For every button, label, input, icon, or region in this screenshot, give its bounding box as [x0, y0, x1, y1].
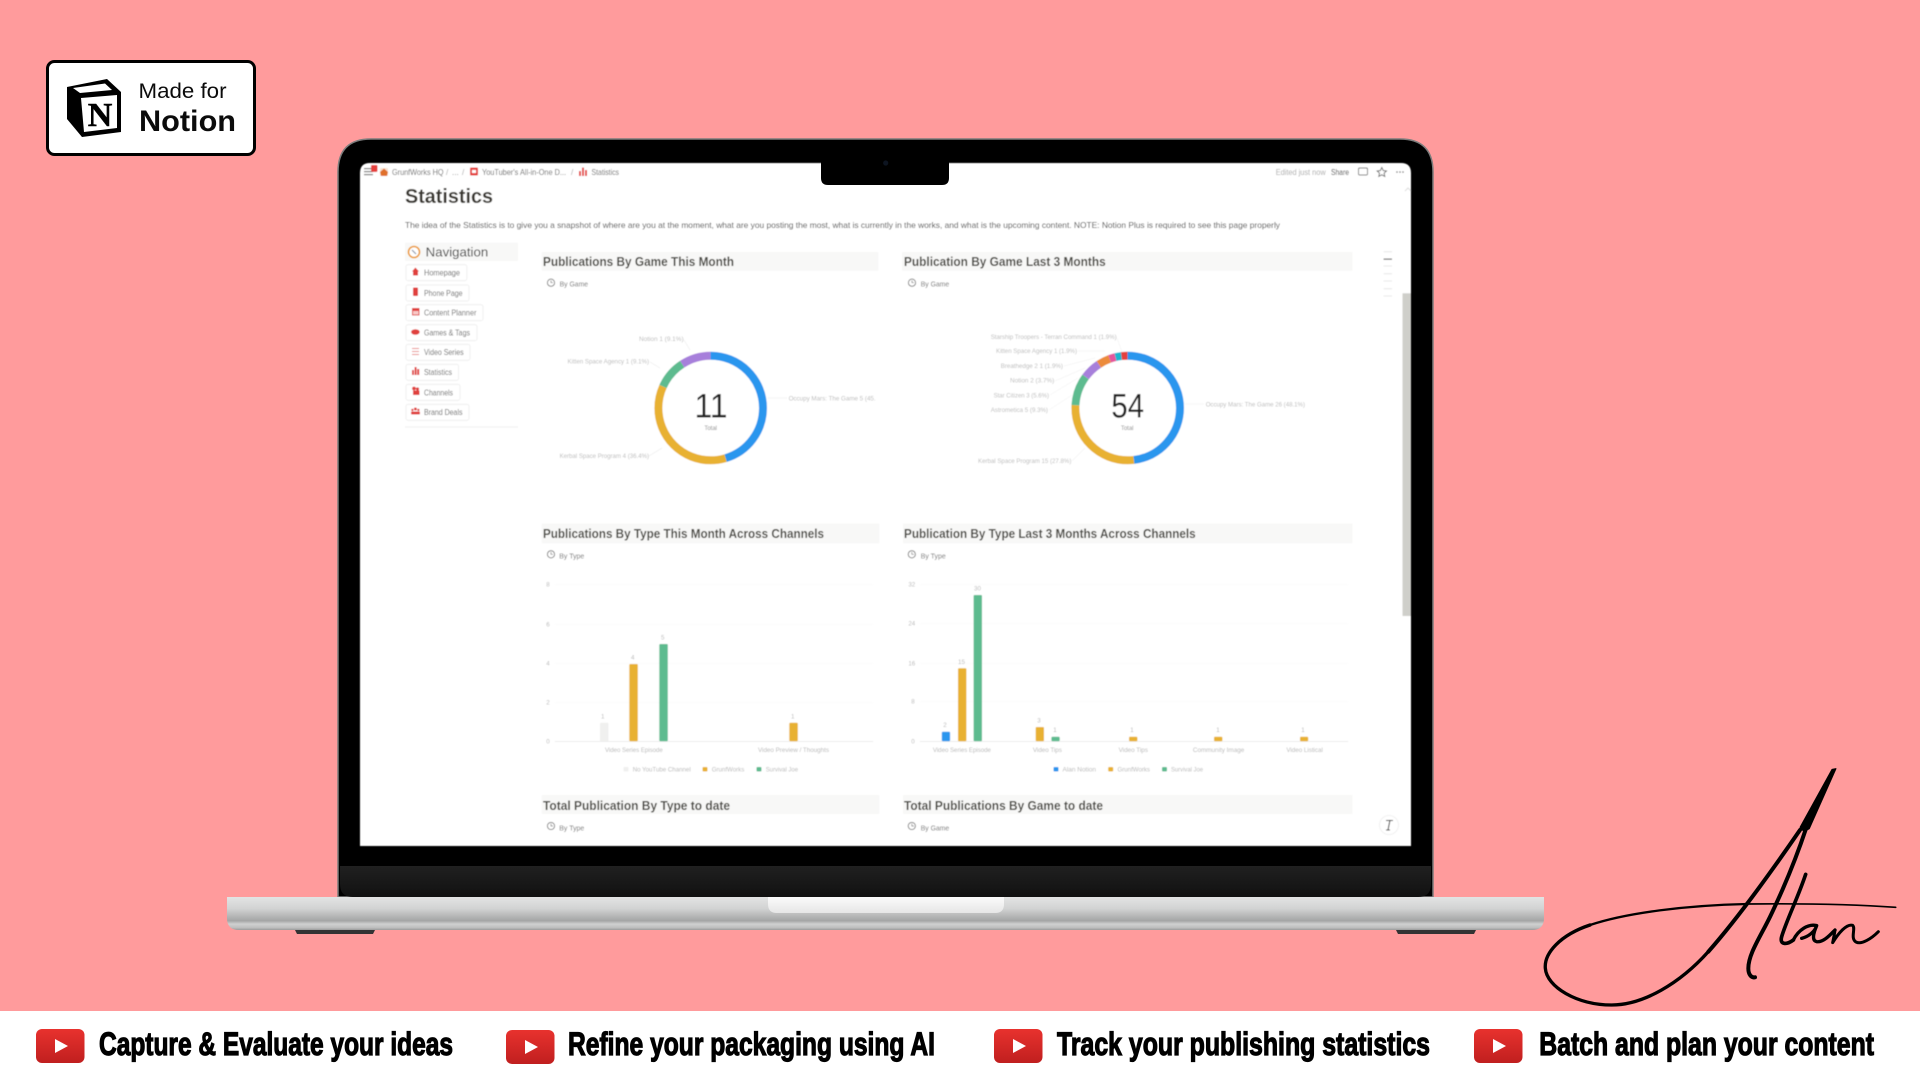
view tab: By Type: By Type [559, 824, 584, 832]
top right controls: Share [1331, 168, 1349, 177]
button: Phone Page [406, 285, 469, 301]
bar chart: type last 3 months: 8 [911, 699, 915, 706]
bar chart: type this month [546, 582, 873, 774]
donut chart: 54 total: Kitten Space Agency 1 (1.9%) [996, 348, 1077, 355]
view tab: By Type [547, 822, 584, 832]
heading: Publication By Game Last 3 Months [904, 255, 1106, 269]
button: Statistics: Statistics [424, 368, 452, 377]
help button with palm icon [1380, 816, 1398, 834]
breadcrumb bar: GrunfWorks HQ [392, 168, 444, 177]
chart legend: GrunfWorks [1118, 766, 1150, 774]
panel: total publications by game [903, 795, 1352, 832]
donut chart: 54 total: Notion 2 (3.7%) [1010, 378, 1054, 385]
bar chart: type this month: 4 [546, 660, 550, 667]
badge text [138, 80, 236, 138]
view tab: By Type: By Type [559, 552, 584, 560]
feature: track statistics [994, 1026, 1430, 1063]
icon: Notion cube logo [67, 79, 121, 137]
feature: refine packaging [506, 1026, 935, 1064]
view tab: By Game: By Game [921, 824, 949, 832]
laptop illustration [227, 139, 1544, 934]
donut chart: 54 total: Astrometica 5 (9.3%) [991, 407, 1048, 414]
button: Homepage: Homepage [424, 268, 461, 278]
bar chart: type this month: 5 [661, 635, 665, 642]
icon: play button [994, 1029, 1042, 1063]
badge: Made for Notion [48, 62, 254, 154]
donut chart: 54 total: Starship Troopers - Terran Command 1 (1.9%) [991, 334, 1117, 341]
page title: Statistics [405, 186, 493, 208]
bar chart: type last 3 months: 30 [974, 586, 981, 593]
donut chart: 11 total: Occupy Mars: The Game 5 (45. [789, 395, 876, 402]
bar chart: type last 3 months: Video Tips [1119, 747, 1148, 754]
navigation heading: Navigation [426, 244, 488, 260]
heading [542, 252, 878, 271]
icon: play button [1474, 1029, 1522, 1063]
donut chart: 54 total: Occupy Mars: The Game 26 (48.1%) [1206, 401, 1305, 408]
bar chart: type last 3 months: 24 [908, 621, 916, 628]
panel: publication by type last 3 months [903, 524, 1352, 774]
button: Content Planner: Content Planner [424, 308, 477, 318]
button: Statistics [406, 364, 459, 380]
scrollbar [1402, 188, 1411, 616]
bar chart: type last 3 months: 1 [1301, 727, 1305, 734]
camera [883, 160, 888, 166]
donut chart: 11 total: Kerbal Space Program 4 (36.4%) [560, 453, 649, 460]
hinge band [340, 866, 1431, 897]
bar chart: type last 3 months: 3 [1037, 718, 1041, 724]
table of contents markers [1384, 252, 1392, 296]
badge text: Made for [138, 80, 227, 103]
bar chart: type this month: 1 [791, 714, 795, 721]
donut chart: 54 total [978, 334, 1305, 465]
chart legend [624, 766, 799, 774]
right foot [1396, 930, 1476, 934]
button: Channels: Channels [424, 388, 453, 398]
view tab: By Game [908, 279, 949, 288]
view tab: By Type: By Type [921, 552, 946, 560]
view tab: By Game [547, 279, 588, 288]
laptop base [227, 897, 1544, 930]
feature: track statistics: Track your publishing statistics [1057, 1026, 1430, 1062]
bar chart: type last 3 months: 32 [908, 582, 916, 589]
view tab: By Type [547, 551, 584, 560]
button: Brand Deals: Brand Deals [424, 408, 462, 417]
chart legend: Survival Joe [1171, 766, 1204, 774]
button: Video Series: Video Series [424, 348, 464, 357]
page description: The idea of the Statistics is to give you a snapshot of where are you at the moment, what are you posting the most, what is currently in the works, and what is the upcoming content. NOTE: Notion Plus is required to see this page properly [405, 220, 1281, 230]
feature: refine packaging: Refine your packaging using AI [568, 1026, 935, 1062]
chart legend: GrunfWorks [712, 766, 744, 774]
view tab: By Game [908, 822, 949, 832]
bar chart: type this month: 4 [631, 654, 635, 662]
bar chart: type last 3 months: 16 [908, 660, 916, 667]
laptop lid [338, 139, 1433, 897]
heading [903, 524, 1352, 543]
heading [542, 795, 879, 814]
donut chart: 54 total: Total [1121, 426, 1134, 432]
button: Content Planner [406, 305, 483, 321]
donut chart: 54 total: Kerbal Space Program 15 (27.8%) [978, 458, 1071, 465]
heading: Publications By Game This Month [543, 255, 734, 269]
top right controls: Edited just now [1276, 168, 1326, 177]
button: Homepage [406, 265, 467, 281]
signature: Alan [1545, 769, 1896, 1005]
bar chart: type last 3 months: 1 [1216, 727, 1220, 734]
panel: publication by game last 3 months [902, 252, 1352, 465]
button: Games & Tags [406, 325, 477, 341]
button: Brand Deals [406, 404, 469, 420]
breadcrumb bar: / [446, 168, 449, 177]
breadcrumb bar [364, 165, 619, 177]
bar chart: type this month: 6 [546, 621, 550, 628]
breadcrumb bar: / [462, 168, 465, 177]
bar chart: type last 3 months: 15 [958, 659, 965, 666]
bar chart: type this month: 0 [546, 739, 550, 746]
button: Phone Page: Phone Page [424, 289, 463, 298]
feature: capture and evaluate ideas [36, 1026, 453, 1063]
chart legend: Survival Joe [766, 766, 799, 774]
panel: publications by type this month [542, 524, 879, 774]
heading: Total Publications By Game to date [904, 799, 1103, 813]
chart legend [1054, 766, 1204, 774]
donut chart: 11 total: Total [704, 426, 717, 432]
donut chart: 11 total [560, 336, 876, 460]
panel: bottom feature strip [0, 1011, 1920, 1080]
bar chart: type last 3 months: Video Listical [1286, 747, 1323, 754]
panel: publications by game this month [542, 252, 878, 460]
panel: navigation sidebar [405, 243, 518, 428]
bar chart: type this month: 2 [546, 700, 550, 707]
button: Games & Tags: Games & Tags [424, 328, 470, 338]
donut chart: 11 total: Notion 1 (9.1%) [639, 336, 684, 343]
view tab: By Game: By Game [921, 280, 949, 288]
panel: laptop screen [360, 163, 1411, 846]
bar chart: type last 3 months: Community Image [1193, 747, 1245, 754]
bar chart: type last 3 months: 2 [943, 722, 947, 729]
button: Video Series [406, 344, 470, 360]
screen notch [821, 158, 949, 185]
icon: Notion cube logo: N [88, 97, 113, 134]
heading: Publications By Type This Month Across Channels [543, 527, 824, 541]
view tab: By Game: By Game [560, 280, 588, 288]
heading [902, 252, 1352, 271]
chart legend: No YouTube Channel [633, 766, 691, 774]
bar chart: type last 3 months: 1 [1130, 727, 1134, 734]
bar chart: type this month: Video Preview / Thoughts [758, 747, 829, 754]
donut chart: 54 total: Breathedge 2 1 (1.9%) [1001, 363, 1063, 370]
base opening notch [768, 897, 1004, 913]
top right controls [1276, 168, 1404, 177]
bar chart: type last 3 months: 0 [911, 738, 915, 745]
heading [903, 795, 1352, 814]
bar chart: type this month: 8 [546, 582, 550, 589]
heading: Publication By Type Last 3 Months Across Channels [904, 527, 1196, 541]
view tab: By Type [908, 551, 946, 560]
breadcrumb bar: Statistics [592, 168, 619, 177]
donut chart: 11 total: 11 [694, 388, 728, 426]
bar chart: type last 3 months [908, 582, 1348, 774]
badge text: Notion [139, 105, 236, 138]
feature: capture and evaluate ideas: Capture & Evaluate your ideas [99, 1026, 453, 1062]
chart legend: Alan Notion [1062, 766, 1097, 774]
button: Channels [406, 384, 460, 400]
bar chart: type this month: 1 [601, 714, 605, 721]
donut chart: 11 total: Kitten Space Agency 1 (9.1%) [568, 359, 649, 366]
bar chart: type this month: Video Series Episode [605, 747, 663, 754]
bar chart: type last 3 months: Video Tips [1033, 747, 1062, 754]
bar chart: type last 3 months: 1 [1053, 727, 1057, 734]
heading [542, 524, 879, 543]
icon: play button [506, 1030, 554, 1064]
breadcrumb bar: / [571, 168, 574, 177]
donut chart: 54 total: 54 [1111, 388, 1144, 426]
heading: Total Publication By Type to date [543, 799, 730, 813]
left foot [295, 930, 375, 934]
bar chart: type last 3 months: Video Series Episode [933, 747, 991, 754]
donut chart: 54 total: Star Citizen 3 (5.6%) [994, 392, 1049, 399]
icon: compass [408, 246, 420, 258]
breadcrumb bar: ... [452, 168, 459, 177]
panel: total publication by type [542, 795, 879, 832]
icon: play button [36, 1029, 84, 1063]
breadcrumb bar: YouTuber's All-in-One D... [482, 168, 566, 177]
